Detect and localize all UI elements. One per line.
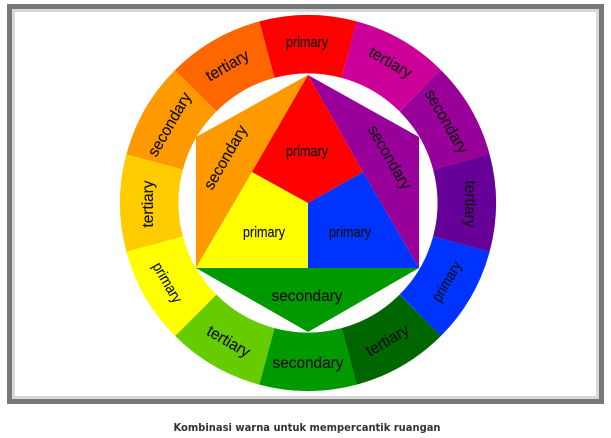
wedge: yellow primary [196,172,308,268]
wedge: red primary [252,75,363,203]
label: yellow primary: primary [149,259,185,306]
segment: red primary [259,15,357,78]
wedge: blue primary [308,172,419,268]
label: purple secondary: secondary [421,87,471,157]
segment: yellow-green tertiary [172,287,288,390]
segment: magenta tertiary [328,16,444,119]
label: yellow-green tertiary: tertiary [204,323,253,361]
segment: amber tertiary [120,154,183,252]
label: bottom secondary: secondary [272,355,344,372]
outer ring labels [140,34,478,372]
segment: green secondary [259,328,357,391]
label: inner red primary: primary [286,143,328,160]
label: inner purple secondary: secondary [364,123,414,193]
segment: red-orange tertiary [172,16,288,119]
segment: purple secondary [392,67,495,183]
label: top primary: primary [286,34,328,51]
label: inner orange secondary: secondary [201,123,251,193]
label: inner green secondary: secondary [272,288,342,305]
label: orange secondary: secondary [145,90,195,160]
label: inner blue primary: primary [329,224,371,241]
inner hexagon labels [201,123,414,305]
segment: orange secondary [121,67,224,183]
segment: violet tertiary [433,154,496,252]
wedge: purple secondary [308,75,419,268]
outer colour ring [120,15,496,391]
caption: Kombinasi warna untuk mempercantik ruangan [174,421,440,434]
label: dark green tertiary: tertiary [363,322,412,360]
inner hexagon of colour wedges [196,75,419,332]
label: blue primary: primary [429,258,466,305]
label: inner yellow primary: primary [243,224,285,241]
label: red-orange tertiary: tertiary [203,47,252,85]
label: amber tertiary: tertiary [140,180,157,228]
wedge: green secondary [196,268,419,332]
segment: yellow primary [121,223,224,339]
segment: dark green tertiary [328,287,444,390]
segment: blue primary [392,223,495,339]
wedge: orange secondary [196,75,308,268]
label: violet tertiary: tertiary [461,180,478,228]
label: magenta tertiary: tertiary [366,44,415,82]
